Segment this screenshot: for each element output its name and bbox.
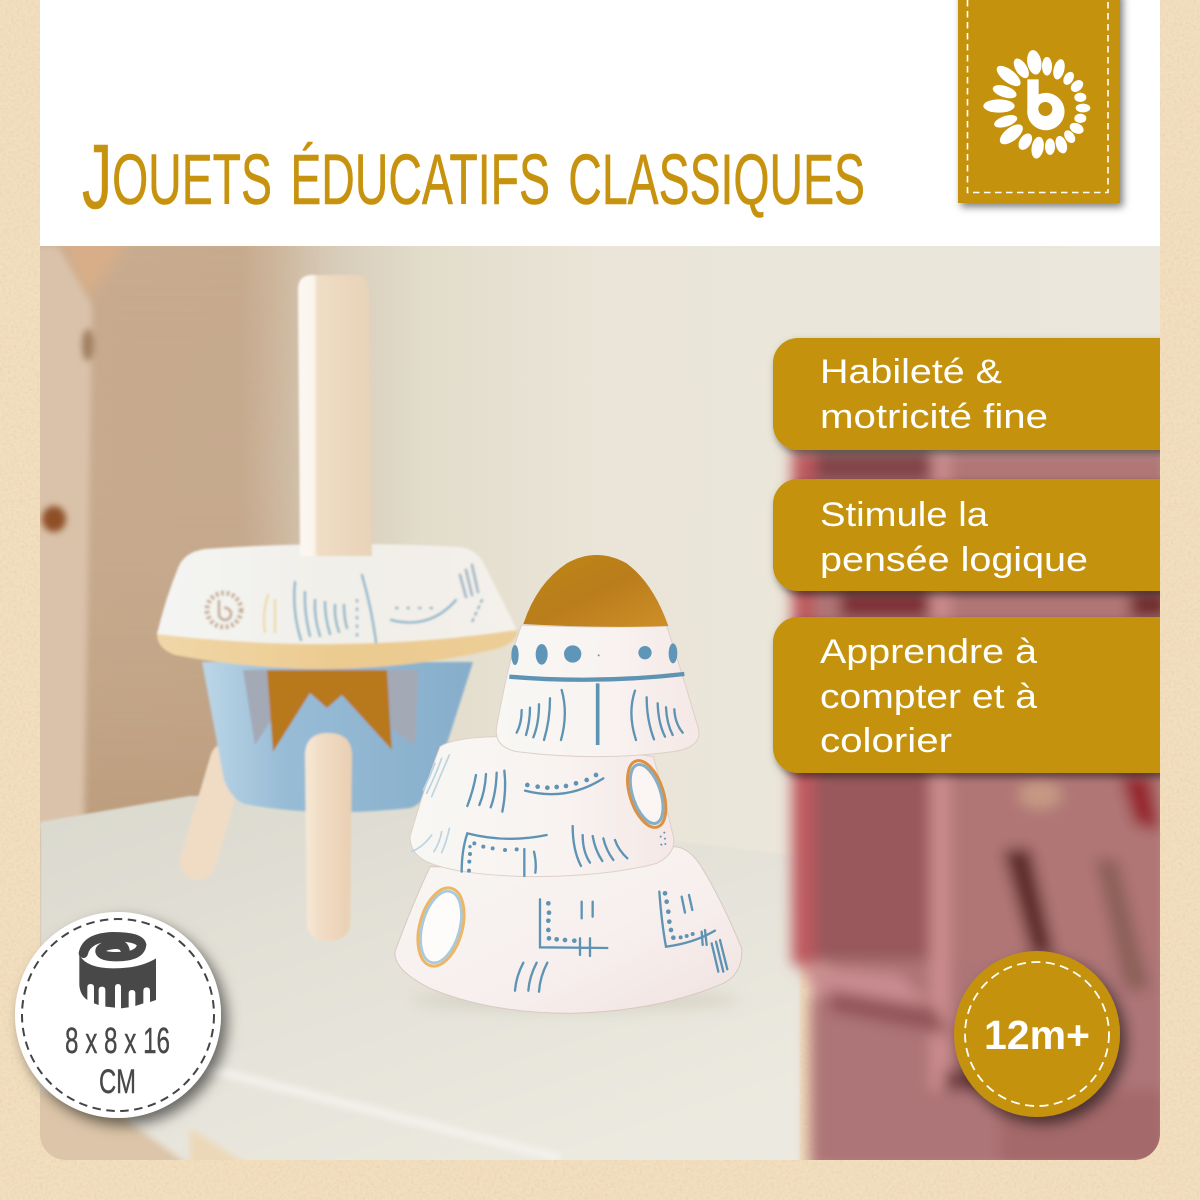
size badge bbox=[15, 912, 221, 1118]
icon: brand flower logo bbox=[983, 49, 1090, 160]
callout: Stimule la pensée logique: Stimule la bbox=[820, 496, 988, 534]
dimensions text: 8 x 8 x 16 bbox=[65, 1020, 170, 1061]
top cone bbox=[496, 555, 699, 757]
stack shadow bbox=[421, 991, 730, 1014]
wall background bbox=[20, 200, 1160, 946]
pink crate, blurred bbox=[792, 450, 1170, 1170]
unit text: CM bbox=[99, 1063, 136, 1101]
middle cone bbox=[410, 736, 674, 877]
back leg bbox=[198, 760, 228, 862]
callout: Habileté et motricité fine bbox=[773, 338, 1180, 450]
mini logo on disc bbox=[207, 593, 241, 627]
callout: Habileté et motricité fine: motricité fine bbox=[820, 398, 1048, 436]
disc rim bbox=[157, 628, 517, 669]
brand tag bbox=[958, 0, 1120, 203]
callout: Stimule la pensée logique bbox=[773, 479, 1180, 591]
title: J bbox=[82, 126, 112, 228]
age badge: 12m+ bbox=[984, 1012, 1090, 1058]
bunting bbox=[267, 670, 392, 752]
centre peg bbox=[298, 275, 372, 556]
toy: rocket stand bbox=[157, 275, 517, 941]
toy: stacking cones bbox=[395, 555, 742, 1013]
icon: tape measure bbox=[79, 937, 156, 1008]
photo panel bbox=[20, 200, 1170, 1170]
callout: Apprendre à compter et à colorier: Apprendre à bbox=[820, 633, 1037, 671]
callout: Stimule la pensée logique: pensée logique bbox=[820, 541, 1088, 579]
age badge bbox=[954, 951, 1120, 1117]
shelf surface bbox=[30, 796, 800, 1170]
front leg bbox=[305, 733, 352, 941]
bottom cone bbox=[395, 847, 742, 1013]
callout: Apprendre à compter et à colorier: compter et à bbox=[820, 678, 1037, 716]
header panel bbox=[40, 0, 1160, 246]
callouts bbox=[773, 338, 1180, 773]
callout: Apprendre à compter et à colorier: colorier bbox=[820, 722, 952, 760]
callout: Habileté et motricité fine: Habileté & bbox=[820, 353, 1002, 391]
blue bowl bbox=[202, 662, 473, 812]
disc markings bbox=[264, 565, 482, 642]
grey flags bbox=[243, 670, 418, 745]
callout: Apprendre à compter et à colorier bbox=[773, 617, 1180, 773]
white disc bbox=[157, 544, 517, 644]
